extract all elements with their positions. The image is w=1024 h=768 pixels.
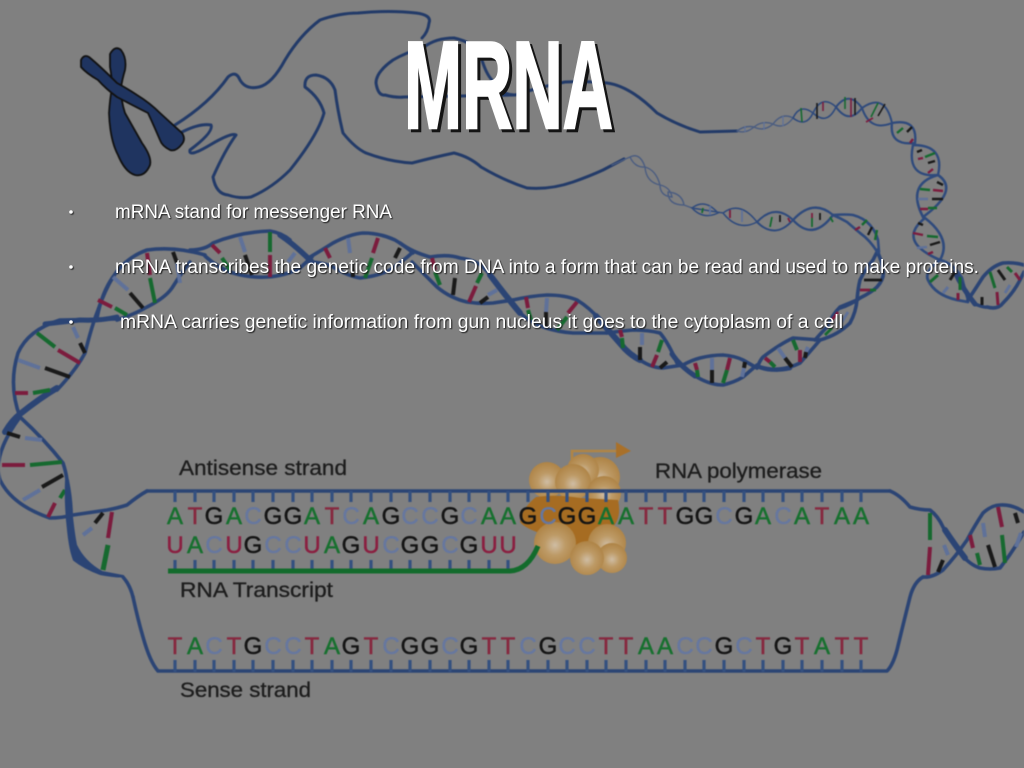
sense sequence letters: G: [715, 633, 733, 660]
label: antisense strand: Antisense strand: [179, 457, 347, 480]
antisense sequence letters: A: [598, 503, 614, 530]
RNA sequence letters: A: [324, 532, 340, 559]
sense sequence letters: T: [364, 633, 379, 660]
sense sequence letters: A: [187, 633, 203, 660]
RNA sequence letters: G: [342, 532, 360, 559]
antisense sequence letters: G: [735, 503, 753, 530]
bullet 2: mRNA transcribes the genetic code from DNA into a form that can be read and used to make proteins.: [115, 257, 979, 278]
antisense sequence letters: T: [639, 503, 654, 530]
antisense sequence letters: A: [794, 503, 810, 530]
sense sequence letters: C: [735, 633, 753, 660]
right DNA helix: [890, 491, 1024, 577]
antisense sequence letters: G: [284, 503, 302, 530]
antisense sequence letters: G: [676, 503, 694, 530]
sense sequence letters: T: [599, 633, 614, 660]
sense sequence letters: C: [284, 633, 302, 660]
sense sequence letters: G: [421, 633, 439, 660]
sense sequence letters: C: [695, 633, 713, 660]
sense sequence letters: T: [619, 633, 634, 660]
antisense sequence letters: A: [363, 503, 379, 530]
rungs at lower left junction: [83, 512, 112, 570]
sense sequence letters: T: [305, 633, 320, 660]
RNA sequence letters: U: [225, 532, 243, 559]
antisense sequence letters: G: [382, 503, 400, 530]
sense sequence letters: G: [539, 633, 557, 660]
rungs of right helix: [928, 507, 1021, 575]
antisense sequence letters: A: [755, 503, 771, 530]
upper right DNA helix: [737, 99, 1024, 308]
RNA sequence letters: U: [499, 532, 517, 559]
antisense sequence letters: A: [167, 503, 183, 530]
middle thin DNA helix: [612, 156, 879, 253]
sense sequence letters: A: [638, 633, 654, 660]
antisense sequence letters: C: [715, 503, 733, 530]
RNA sequence letters: C: [382, 532, 400, 559]
antisense sequence letters: G: [558, 503, 576, 530]
sense sequence letters: T: [482, 633, 497, 660]
sense sequence letters: C: [578, 633, 596, 660]
RNA sequence letters: C: [441, 532, 459, 559]
sense sequence letters: G: [244, 633, 262, 660]
RNA sequence letters: U: [303, 532, 321, 559]
sense sequence letters: A: [814, 633, 830, 660]
sense sequence letters: T: [795, 633, 810, 660]
antisense sequence letters: G: [578, 503, 596, 530]
sense sequence letters: G: [342, 633, 360, 660]
sense sequence letters: T: [756, 633, 771, 660]
sense sequence letters: C: [205, 633, 223, 660]
sense sequence letters: A: [657, 633, 673, 660]
sense sequence letters: T: [168, 633, 183, 660]
main DNA double helix: [0, 231, 883, 518]
lower left strand junction: [66, 480, 123, 577]
antisense sequence letters: T: [658, 503, 673, 530]
strand continuing to sense strand: [123, 577, 133, 597]
rungs of main helix: [2, 232, 882, 517]
sense sequence letters: C: [382, 633, 400, 660]
antisense sequence letters: A: [304, 503, 320, 530]
antisense sequence letters: C: [421, 503, 439, 530]
antisense sequence letters: A: [853, 503, 869, 530]
antisense sequence letters: T: [325, 503, 340, 530]
rungs of upper right helix: [745, 97, 1020, 305]
antisense sequence letters: G: [205, 503, 223, 530]
RNA sequence letters: G: [460, 532, 478, 559]
antisense sequence letters: G: [695, 503, 713, 530]
sense sequence letters: T: [501, 633, 516, 660]
label: RNA transcript: RNA Transcript: [180, 579, 333, 602]
antisense sequence letters: G: [264, 503, 282, 530]
RNA transcript strand: [168, 546, 538, 571]
thin strand from chromosome, upper route: [175, 12, 737, 132]
sense sequence letters: T: [227, 633, 242, 660]
label: sense strand: Sense strand: [180, 679, 311, 702]
RNA sequence letters: G: [401, 532, 419, 559]
RNA sequence letters: U: [480, 532, 498, 559]
antisense sequence letters: G: [519, 503, 537, 530]
sense sequence letters: G: [460, 633, 478, 660]
icon: chromosome: [81, 48, 184, 175]
RNA sequence letters: A: [187, 532, 203, 559]
antisense sequence letters: C: [774, 503, 792, 530]
thin strand from chromosome, lower route: [182, 75, 624, 198]
RNA sequence letters: C: [264, 532, 282, 559]
RNA sequence letters: U: [362, 532, 380, 559]
antisense sequence letters: G: [441, 503, 459, 530]
antisense sequence letters: A: [481, 503, 497, 530]
sense sequence letters: C: [519, 633, 537, 660]
antisense DNA strand: [147, 491, 890, 502]
RNA sequence letters: G: [244, 532, 262, 559]
bullet 3: mRNA carries genetic information from gun nucleus it goes to the cytoplasm of a cell: [120, 312, 843, 333]
label: RNA polymerase: RNA polymerase: [655, 460, 822, 483]
rungs of middle helix: [702, 206, 877, 240]
RNA sequence letters: U: [166, 532, 184, 559]
antisense sequence letters: A: [618, 503, 634, 530]
polymerase arrow: [572, 442, 631, 466]
antisense sequence letters: C: [244, 503, 262, 530]
sense sequence letters: T: [854, 633, 869, 660]
sense DNA strand: [133, 577, 923, 672]
antisense sequence letters: C: [539, 503, 557, 530]
antisense sequence letters: C: [342, 503, 360, 530]
RNA polymerase complex: [520, 442, 631, 575]
antisense sequence letters: A: [500, 503, 516, 530]
sense sequence letters: G: [401, 633, 419, 660]
antisense sequence letters: T: [815, 503, 830, 530]
sense sequence letters: C: [264, 633, 282, 660]
sense sequence letters: G: [774, 633, 792, 660]
RNA sequence letters: C: [284, 532, 302, 559]
antisense sequence letters: A: [834, 503, 850, 530]
title: MRNA: [404, 17, 613, 155]
bullet 1: mRNA stand for messenger RNA: [115, 202, 392, 223]
RNA sequence letters: G: [421, 532, 439, 559]
sense sequence letters: C: [558, 633, 576, 660]
RNA sequence letters: C: [205, 532, 223, 559]
sense sequence letters: C: [676, 633, 694, 660]
antisense sequence letters: T: [188, 503, 203, 530]
antisense sequence letters: C: [460, 503, 478, 530]
antisense sequence letters: C: [401, 503, 419, 530]
sense sequence letters: A: [324, 633, 340, 660]
sense sequence letters: T: [835, 633, 850, 660]
antisense sequence letters: A: [226, 503, 242, 530]
sense sequence letters: C: [441, 633, 459, 660]
